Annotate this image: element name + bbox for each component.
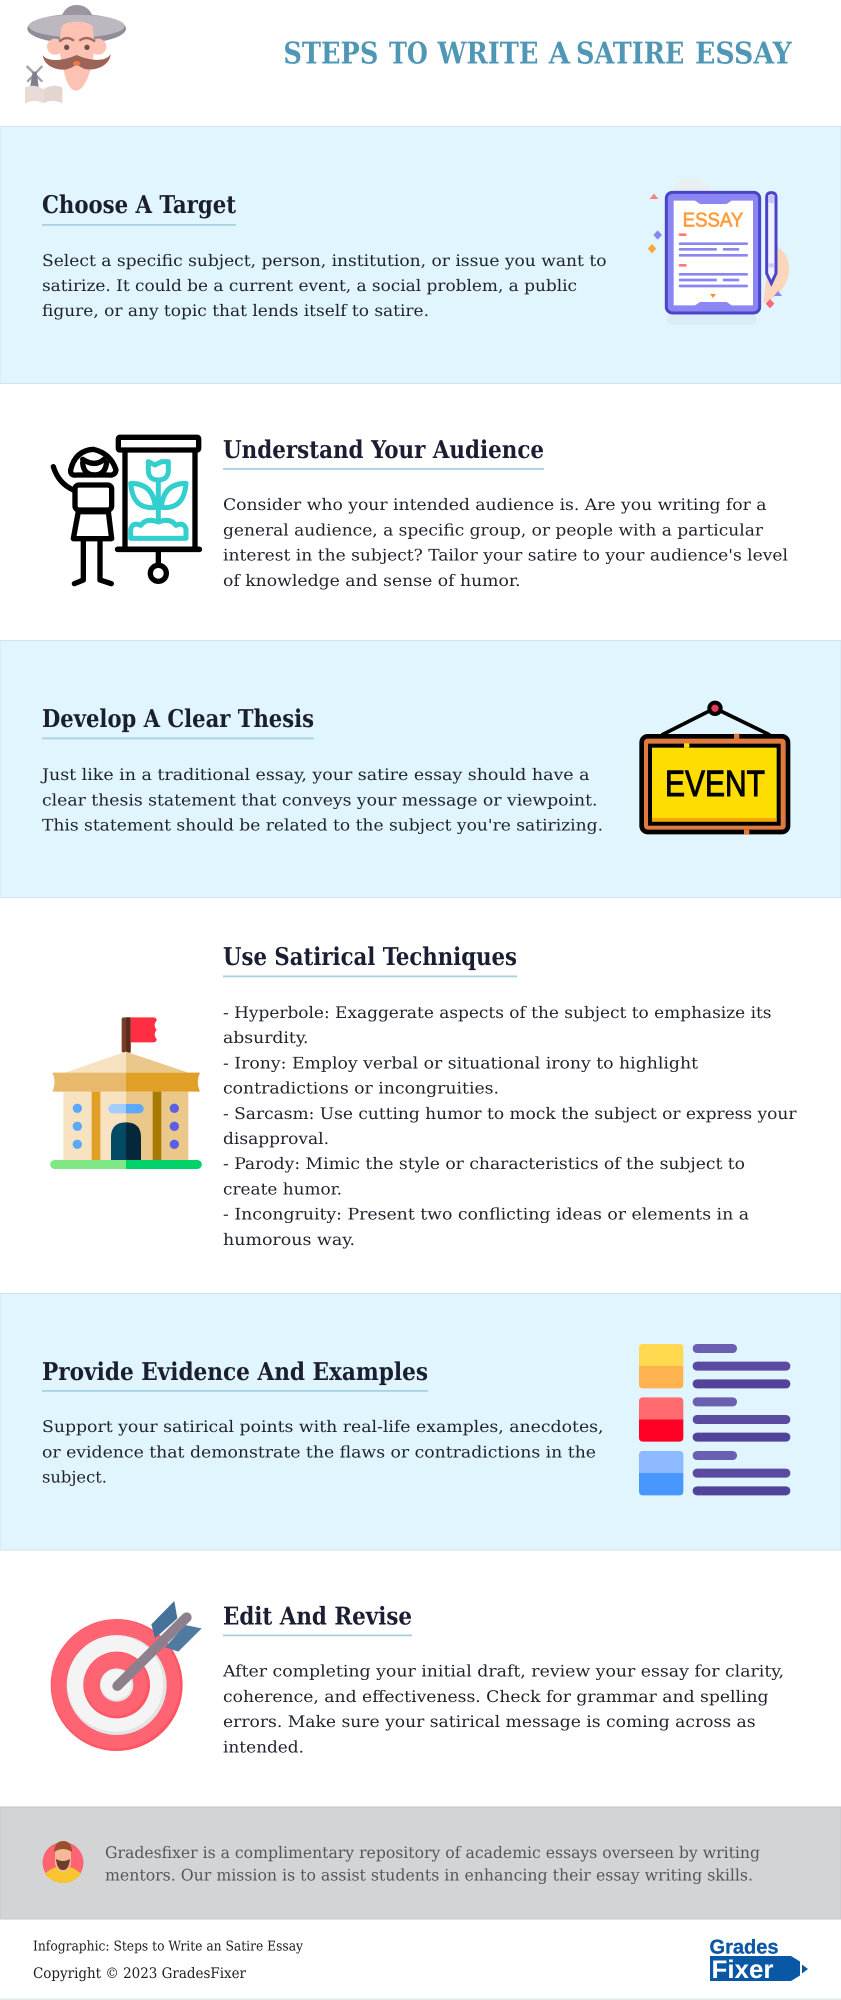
heading: choose a target: Choose A Target — [42, 190, 237, 219]
title: A — [548, 36, 571, 72]
text block: provide evidence and examples: subject. — [42, 1468, 107, 1487]
icon: coloured list — [639, 1344, 790, 1495]
icon: essay tablet and pen — [648, 178, 789, 324]
logo: grades fixer: Fixer — [712, 1956, 774, 1984]
text block: edit and revise: coherence, and effectiveness. Check for grammar and spelling — [223, 1687, 768, 1706]
text block: techniques list: - Parody: Mimic the style or characteristics of the subject to — [223, 1154, 745, 1173]
logo: grades fixer: Grades — [710, 1936, 778, 1958]
text block: choose a target: Select a specific subject, person, institution, or issue you want to — [42, 251, 606, 270]
text block: understand your audience: of knowledge and sense of humor. — [223, 571, 520, 590]
panel: edit and revise — [51, 1601, 784, 1756]
heading: use satirical techniques: Use Satirical Techniques — [223, 942, 517, 971]
panel: understand your audience — [53, 435, 788, 590]
text block: provide evidence and examples: or evidence that demonstrate the flaws or contradictions in the — [42, 1442, 596, 1461]
icon: presenter with plant chart — [53, 437, 199, 584]
icon: hanging event sign: EVENT — [665, 763, 765, 804]
text block: techniques list: - Incongruity: Present two conflicting ideas or elements in a — [223, 1205, 749, 1224]
heading: develop a clear thesis: Develop A Clear Thesis — [42, 704, 314, 733]
title: SATIRE — [576, 36, 684, 72]
text block: develop a clear thesis — [40, 765, 603, 835]
title: WRITE — [437, 36, 538, 72]
text block: understand your audience — [223, 495, 788, 590]
text block: understand your audience: general audience, a specific group, or people with a particular — [223, 520, 763, 539]
text block: techniques list — [223, 1003, 797, 1249]
icon: building with flag — [50, 1017, 202, 1169]
text block: understand your audience: Consider who your intended audience is. Are you writing for a — [223, 495, 767, 514]
icon: target with arrow — [51, 1601, 202, 1751]
title: TO — [389, 36, 428, 72]
icon: hanging event sign — [642, 701, 788, 835]
title — [283, 36, 792, 72]
panel: choose a target — [0, 126, 841, 384]
title: ESSAY — [695, 36, 792, 72]
header — [25, 5, 792, 103]
heading: edit and revise: Edit And Revise — [223, 1602, 412, 1630]
text block: edit and revise: intended. — [223, 1737, 304, 1756]
text block: techniques list: absurdity. — [223, 1028, 308, 1047]
text block: edit and revise: After completing your initial draft, review your essay for clarity, — [222, 1662, 784, 1681]
panel: develop a clear thesis — [0, 640, 841, 898]
text block: about gradesfixer — [105, 1843, 760, 1884]
text block: about gradesfixer: Gradesfixer is a complimentary repository of academic essays overseen by writing — [105, 1843, 760, 1862]
text block: understand your audience: interest in the subject? Tailor your satire to your audience's level — [223, 546, 788, 565]
icon: essay tablet and pen: ESSAY — [683, 209, 743, 231]
icon: bearded man in hat with windmill and book — [25, 5, 126, 103]
text block: choose a target — [42, 251, 606, 320]
panel: about gradesfixer — [0, 1807, 841, 1919]
text block: techniques list: - Irony: Employ verbal or situational irony to highlight — [223, 1053, 698, 1072]
text block: choose a target: figure, or any topic that lends itself to satire. — [42, 301, 429, 320]
icon: author avatar — [42, 1841, 84, 1883]
text block: about gradesfixer: mentors. Our mission is to assist students in enhancing their essay writing skills. — [105, 1866, 753, 1884]
footer — [0, 1936, 841, 2000]
text block: develop a clear thesis: This statement should be related to the subject you're satirizing. — [42, 816, 603, 835]
text block: provide evidence and examples — [42, 1417, 604, 1487]
infographic credit: Infographic: Steps to Write an Satire Essay — [33, 1938, 303, 1954]
text block: techniques list: - Sarcasm: Use cutting humor to mock the subject or express your — [223, 1104, 797, 1123]
text block: techniques list: create humor. — [223, 1179, 342, 1198]
text block: provide evidence and examples: Support your satirical points with real-life examples, anecdotes, — [42, 1417, 604, 1436]
text block: techniques list: - Hyperbole: Exaggerate aspects of the subject to emphasize its — [223, 1003, 772, 1022]
logo: grades fixer — [710, 1936, 808, 1984]
text block: edit and revise: errors. Make sure your satirical message is coming across as — [223, 1712, 756, 1731]
text block: edit and revise — [222, 1662, 784, 1756]
heading: provide evidence and examples: Provide Evidence And Examples — [42, 1357, 428, 1386]
copyright: Copyright © 2023 GradesFixer — [33, 1966, 247, 1982]
text block: techniques list: disapproval. — [223, 1129, 329, 1148]
text block: choose a target: satirize. It could be a current event, a social problem, a public — [42, 276, 577, 295]
text block: develop a clear thesis: clear thesis statement that conveys your message or viewpoint. — [42, 790, 598, 809]
panel: provide evidence and examples — [0, 1294, 841, 1550]
heading: understand your audience: Understand Your Audience — [223, 435, 544, 464]
text block: techniques list: humorous way. — [223, 1230, 355, 1249]
panel: use satirical techniques — [50, 942, 797, 1249]
text block: develop a clear thesis: Just like in a traditional essay, your satire essay should have a — [40, 765, 590, 784]
text block: techniques list: contradictions or incongruities. — [223, 1079, 499, 1098]
title: STEPS — [283, 36, 378, 72]
